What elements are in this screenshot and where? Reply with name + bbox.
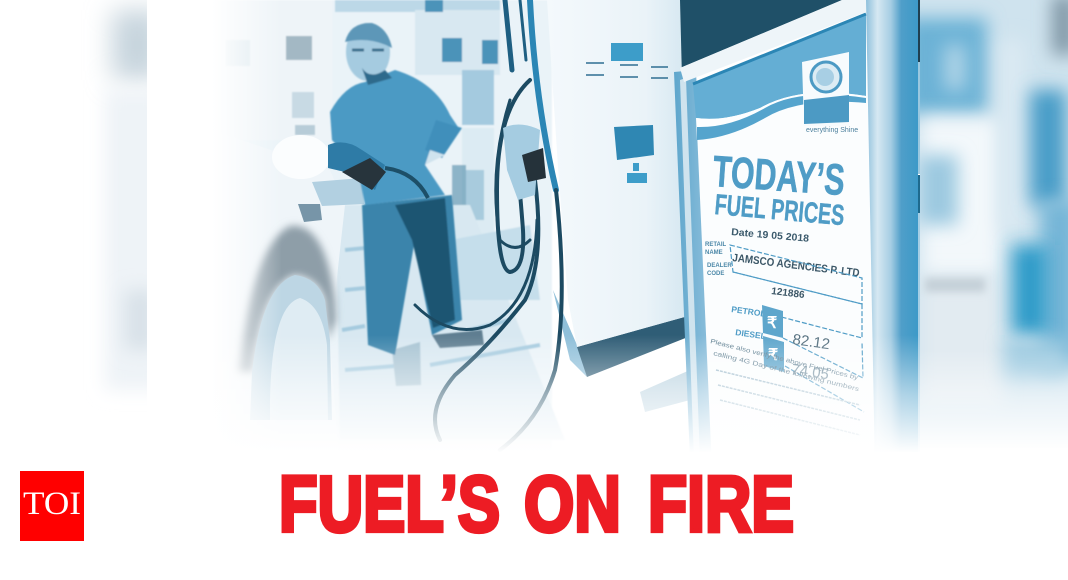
photo: hanging hoses	[415, 0, 538, 440]
TOI logo	[20, 471, 84, 541]
sign: heading FUEL PRICES: FUEL PRICES	[713, 189, 846, 232]
sign: white board	[696, 118, 711, 439]
sign: rupee box diesel	[763, 336, 784, 372]
sign: notice text	[710, 338, 861, 393]
dispenser: info plate	[614, 125, 654, 160]
main photo	[228, 0, 920, 448]
photo: background strip behind post	[918, 0, 920, 442]
sign: rupee box petrol	[762, 305, 783, 338]
sign: side labels: CODE	[707, 271, 724, 277]
sign: top rail	[680, 0, 866, 82]
sign: notice text: calling 4G Day of the following numbers	[713, 350, 861, 393]
sign: diesel label: DIESEL	[735, 327, 767, 341]
sign: wave	[696, 92, 866, 140]
white fade left of photo	[147, 0, 212, 470]
sign: side labels: DEALER	[707, 263, 732, 269]
blurred right background panel	[920, 0, 1068, 432]
blurred left background panel	[99, 0, 147, 390]
sign: dealer code: 121886	[771, 286, 806, 301]
headline	[279, 459, 794, 548]
sign: rupee box petrol: ₹	[767, 315, 777, 332]
sign: blue header	[693, 14, 866, 119]
photo: pavement right	[640, 370, 690, 412]
sign: side labels	[705, 242, 732, 277]
dispenser: dashes	[586, 63, 668, 78]
sign: dashed boxes	[730, 245, 864, 412]
dispenser: top label	[611, 43, 643, 61]
photo: dark foliage	[678, 0, 842, 68]
photo: fuel dispenser body	[547, 0, 688, 377]
sign: notice text: Please also verify the above Fuel Prices by	[710, 338, 860, 382]
sign: right post	[866, 0, 918, 470]
sign: notice rules	[716, 370, 860, 435]
photo: main hose along dispenser	[500, 0, 562, 450]
sign: side labels: NAME	[705, 250, 723, 256]
fuel price sign	[674, 0, 918, 470]
white fade at bottom of photo	[147, 335, 920, 453]
sign: left frame	[674, 70, 712, 460]
headline: ON	[524, 459, 621, 548]
sign: rupee box diesel: ₹	[768, 347, 778, 364]
headline: FUEL’S	[279, 459, 500, 548]
photo: man with fuel nozzle	[330, 23, 484, 386]
headline: FIRE	[648, 459, 794, 548]
sign: heading TODAY'S: TODAY’S	[711, 147, 846, 205]
sign: dealer name: JAMSCO AGENCIES P. LTD	[732, 252, 860, 280]
photo: fuel nozzle in hand	[328, 142, 428, 198]
photo: car with mirror and wheel	[238, 135, 364, 420]
sign: diesel price: 74.05	[790, 361, 830, 383]
photo: pump nozzle on holder	[503, 124, 546, 200]
sign: date: Date 19 05 2018	[731, 227, 810, 245]
sign: petrol label: PETROL	[731, 304, 766, 319]
sign: brand logo	[802, 52, 858, 134]
sign: petrol price: 82.12	[791, 331, 831, 353]
sign: brand logo: everything Shine	[806, 127, 858, 134]
sign: side labels: RETAIL	[705, 242, 727, 248]
TOI logo: TOI	[23, 486, 81, 522]
dispenser: small label	[627, 173, 647, 183]
photo: street background	[228, 0, 558, 426]
